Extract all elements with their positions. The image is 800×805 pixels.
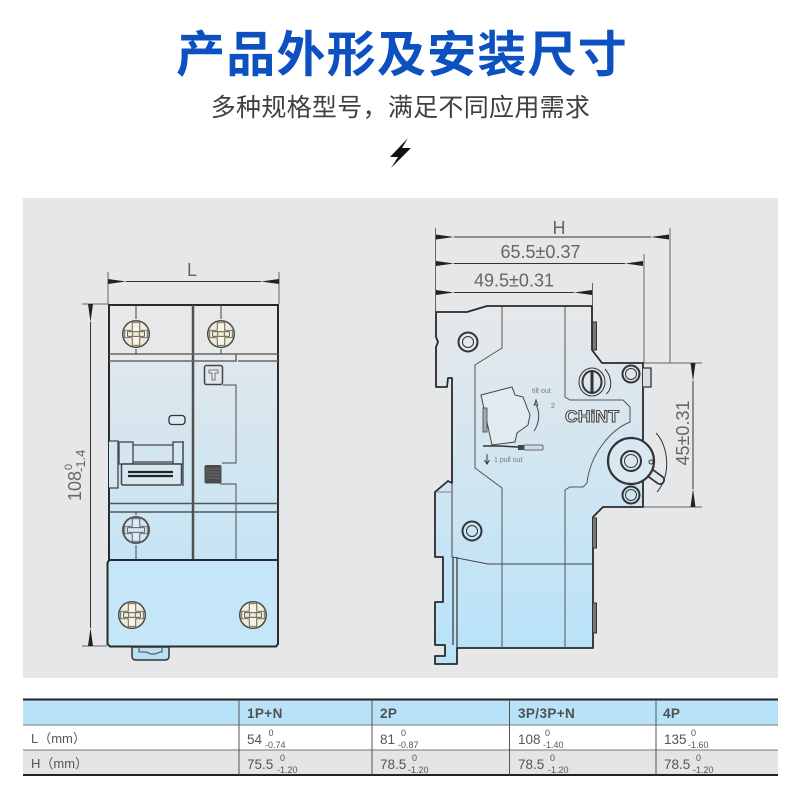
title: 产品外形及安装尺寸 bbox=[176, 16, 628, 86]
dimension H bbox=[436, 218, 670, 363]
row H: -1.20 bbox=[277, 765, 298, 775]
dimension 65.5: 65.5±0.37 bbox=[501, 242, 580, 262]
table header bbox=[23, 699, 778, 725]
row L: -1.60 bbox=[688, 740, 709, 750]
table header: 2P bbox=[380, 706, 397, 721]
row H: 0 bbox=[412, 753, 417, 763]
front view drawing bbox=[63, 260, 279, 660]
mounting holes bbox=[458, 332, 640, 540]
dimension L: L bbox=[187, 260, 197, 280]
row H: 78.5 bbox=[664, 757, 690, 772]
dimension 108: 0 bbox=[63, 464, 75, 470]
row H: 78.5 bbox=[380, 757, 406, 772]
table header: 1P+N bbox=[247, 706, 283, 721]
dimension L bbox=[108, 260, 279, 304]
row L: 0 bbox=[691, 728, 696, 738]
subtitle: 多种规格型号，满足不同应用需求 bbox=[211, 88, 590, 124]
terminal screws bbox=[122, 320, 235, 544]
panel: dimension drawings bbox=[23, 198, 778, 678]
dimension H: H bbox=[552, 218, 566, 238]
row L: -0.87 bbox=[398, 740, 419, 750]
release knob bbox=[608, 433, 667, 492]
row H: 78.5 bbox=[518, 757, 544, 772]
side body bbox=[435, 306, 643, 664]
row L: -0.74 bbox=[265, 740, 286, 750]
removal diagram: tilt out bbox=[532, 388, 551, 395]
row H: 0 bbox=[696, 753, 701, 763]
lower terminal block bbox=[108, 560, 278, 660]
row H bbox=[23, 750, 778, 775]
row L: -1.40 bbox=[543, 740, 564, 750]
table header: 4P bbox=[663, 706, 680, 721]
row H: -1.20 bbox=[548, 765, 569, 775]
row L: 0 bbox=[545, 728, 550, 738]
row L: 135 bbox=[664, 732, 687, 747]
row H: 0 bbox=[550, 753, 555, 763]
dimension 49.5 bbox=[454, 270, 592, 306]
dimension 45 bbox=[644, 363, 702, 507]
row H: 0 bbox=[280, 753, 285, 763]
indicator window bbox=[169, 416, 185, 424]
row L: 81 bbox=[380, 732, 395, 747]
dimension 45: 45±0.31 bbox=[673, 401, 693, 465]
specification table bbox=[23, 699, 778, 775]
toggle handle bbox=[109, 441, 183, 488]
row H: -1.20 bbox=[408, 765, 429, 775]
test button T bbox=[204, 366, 222, 384]
row H: -1.20 bbox=[693, 765, 714, 775]
icon: lightning bolt bbox=[390, 138, 411, 168]
row L: L（mm） bbox=[31, 731, 86, 746]
adjustment screw bbox=[579, 368, 611, 396]
mount tab bbox=[643, 368, 651, 387]
removal diagram bbox=[481, 387, 555, 464]
removal diagram: 2 bbox=[551, 403, 555, 410]
rail hooks bbox=[592, 322, 596, 633]
table header: 3P/3P+N bbox=[518, 706, 575, 721]
dimension 108: 108 bbox=[65, 471, 85, 501]
breaker body bbox=[109, 305, 278, 561]
row H: 75.5 bbox=[247, 757, 273, 772]
row L: 0 bbox=[268, 728, 274, 738]
CHINT logo: CHiNT bbox=[565, 408, 619, 426]
row L bbox=[31, 728, 709, 750]
side view drawing bbox=[435, 218, 702, 664]
dimension 108 bbox=[63, 304, 108, 646]
row L: 108 bbox=[518, 732, 541, 747]
removal diagram: 1 pull out bbox=[494, 457, 522, 464]
row L: 54 bbox=[247, 732, 263, 747]
dimension 49.5: 49.5±0.31 bbox=[474, 270, 554, 290]
row H: H（mm） bbox=[31, 756, 88, 771]
slider bbox=[204, 465, 222, 484]
row L: 0 bbox=[401, 728, 406, 738]
dimension 108: -1.4 bbox=[73, 450, 88, 472]
